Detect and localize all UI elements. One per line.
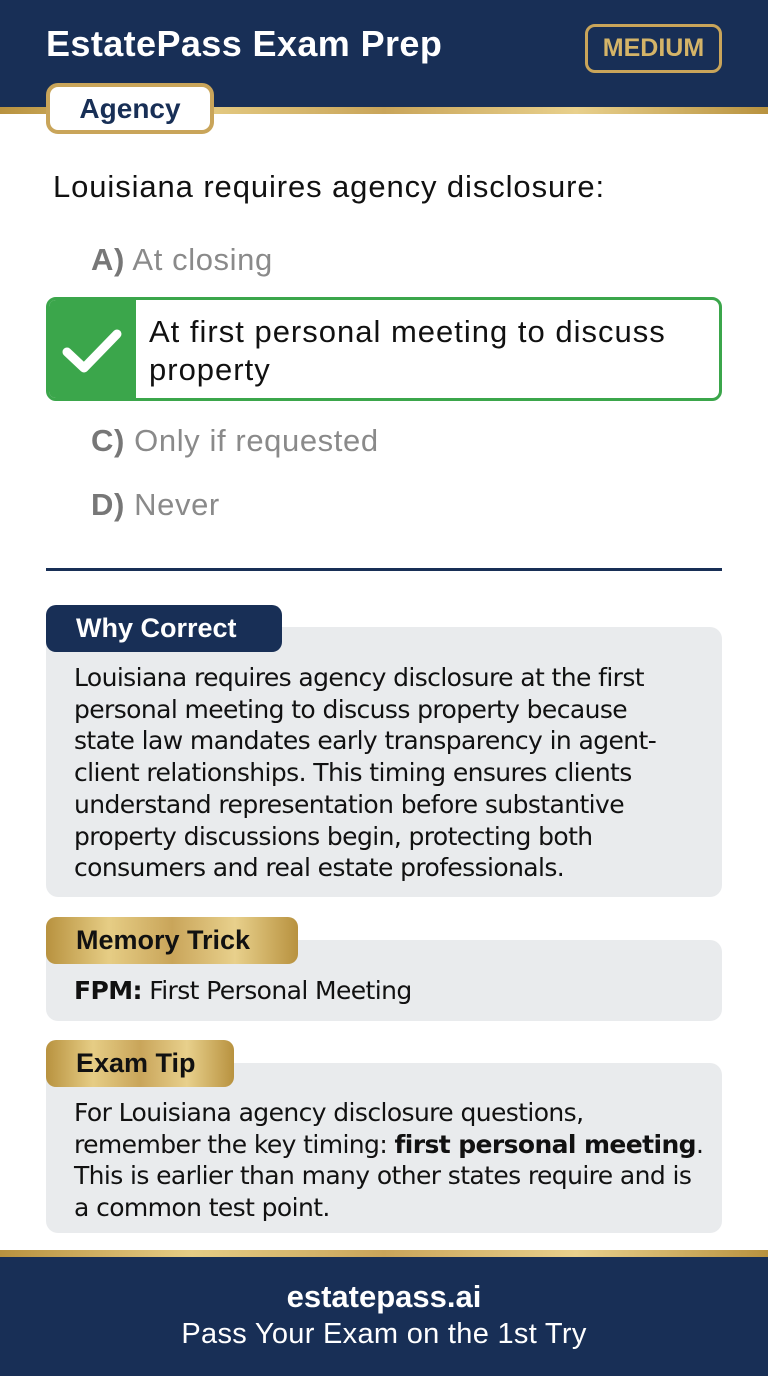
divider	[46, 568, 722, 571]
panel: why correct	[46, 627, 722, 897]
heading: exam tip: Exam Tip	[76, 1048, 196, 1078]
text: why correct: understand representation before substantive	[74, 790, 624, 819]
text: exam tip: a common test point.	[74, 1193, 330, 1222]
text: exam tip: For Louisiana agency disclosure questions,	[74, 1098, 583, 1127]
footer	[0, 1257, 768, 1376]
text: why correct: consumers and real estate professionals.	[74, 853, 564, 882]
option A: A) At closing	[91, 242, 273, 277]
header bar	[0, 0, 768, 109]
text: memory trick: FPM: First Personal Meeting	[74, 976, 412, 1005]
text: exam tip	[74, 1098, 703, 1222]
text: exam tip: This is earlier than many other states require and is	[74, 1161, 691, 1190]
correct answer text	[149, 314, 666, 387]
footer tagline: Pass Your Exam on the 1st Try	[181, 1318, 587, 1350]
category tag: agency: Agency	[79, 93, 181, 124]
text: why correct: state law mandates early transparency in agent-	[74, 726, 656, 755]
panel: memory trick	[46, 940, 722, 1021]
text: why correct: Louisiana requires agency disclosure at the first	[74, 663, 644, 692]
correct answer text: At first personal meeting to discuss	[149, 314, 666, 349]
heading: exam tip	[46, 1040, 234, 1087]
heading: memory trick	[46, 917, 298, 964]
icon: checkmark	[49, 300, 136, 398]
correct answer text: property	[149, 352, 271, 387]
heading: why correct	[46, 605, 282, 652]
badge: medium	[585, 24, 722, 73]
option C: C) Only if requested	[91, 423, 379, 458]
heading: why correct: Why Correct	[76, 613, 237, 643]
footer gold line	[0, 1250, 768, 1257]
badge: medium: MEDIUM	[603, 34, 704, 62]
footer url: estatepass.ai	[287, 1279, 481, 1314]
option D: D) Never	[91, 487, 220, 522]
text: why correct	[74, 663, 656, 882]
header gold line	[0, 107, 768, 114]
panel: exam tip	[46, 1063, 722, 1233]
text: exam tip: remember the key timing: first personal meeting.	[74, 1130, 703, 1159]
text: why correct: property discussions begin, protecting both	[74, 822, 593, 851]
text: why correct: client relationships. This timing ensures clients	[74, 758, 632, 787]
heading: memory trick: Memory Trick	[76, 925, 250, 955]
title: EstatePass Exam Prep	[46, 23, 442, 64]
text: why correct: personal meeting to discuss property because	[74, 695, 627, 724]
question: Louisiana requires agency disclosure:	[53, 169, 605, 204]
option B correct	[46, 297, 722, 401]
category tag: agency	[46, 83, 214, 134]
